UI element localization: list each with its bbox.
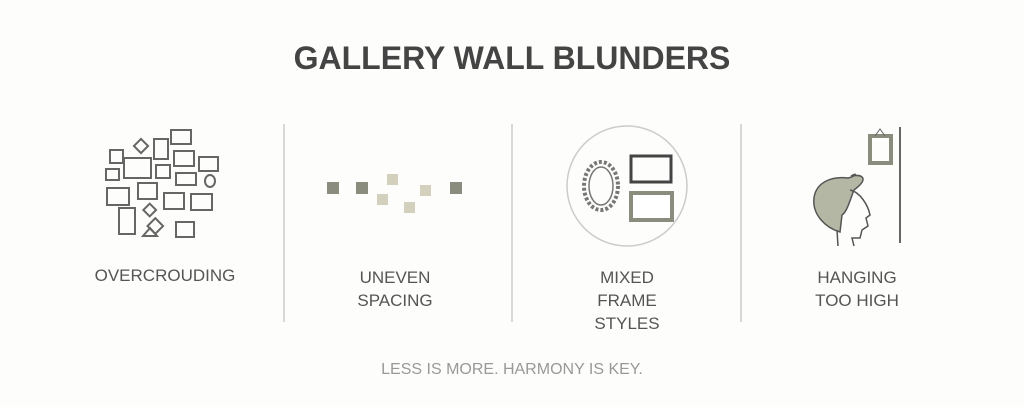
label: uneven spacing [357, 268, 433, 310]
icon: hanging too high [814, 127, 900, 246]
label: mixed frame styles: STYLES [594, 314, 660, 333]
label: uneven spacing: SPACING [357, 291, 433, 310]
icon: uneven spacing squares [327, 174, 462, 213]
footer tagline: LESS IS MORE. HARMONY IS KEY. [381, 361, 643, 378]
label: overcrowding: OVERCROUDING [95, 266, 235, 285]
label: hanging too high: HANGING [817, 268, 897, 287]
icon: overcrowded frames [106, 130, 218, 237]
label: mixed frame styles: MIXED [600, 268, 654, 287]
icon: mixed frames [567, 126, 687, 246]
label: mixed frame styles: FRAME [597, 291, 657, 310]
label: hanging too high [815, 268, 899, 310]
title: GALLERY WALL BLUNDERS [294, 40, 730, 76]
label: uneven spacing: UNEVEN [360, 268, 430, 287]
label: hanging too high: TOO HIGH [815, 291, 899, 310]
label: mixed frame styles [594, 268, 660, 333]
